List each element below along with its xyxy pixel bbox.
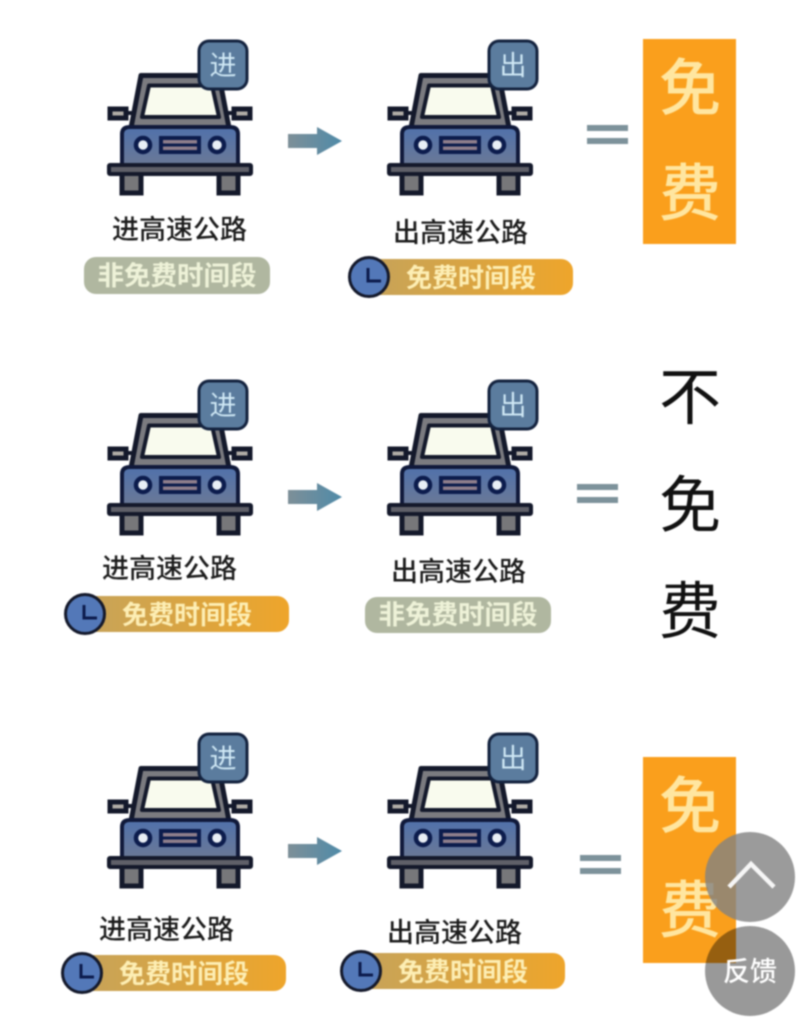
icon: exit car xyxy=(389,734,537,886)
button: scroll to top xyxy=(705,832,795,922)
text: entry label: 进高速公路 xyxy=(99,915,234,945)
icon: exit car: 出 xyxy=(500,391,526,421)
result: not free: 免 xyxy=(659,472,721,541)
icon: exit car: 出 xyxy=(500,744,526,774)
pill: non-free period: 非免费时间段 xyxy=(98,261,256,291)
result: free xyxy=(643,757,736,963)
icon: exit car xyxy=(389,41,537,193)
equals sign xyxy=(580,855,621,874)
text: entry label: 进高速公路 xyxy=(102,554,237,584)
equals sign xyxy=(577,484,618,503)
pill: free period with clock xyxy=(66,594,289,634)
icon: entry car: 进 xyxy=(210,391,236,421)
result: free: 免 xyxy=(659,773,721,842)
result: free: 费 xyxy=(659,160,721,229)
icon: exit car: 出 xyxy=(500,51,526,81)
result: free xyxy=(643,39,736,244)
result: not free: 费 xyxy=(659,578,721,647)
pill: free period with clock xyxy=(342,952,565,990)
pill: non-free period: 非免费时间段 xyxy=(378,600,538,630)
pill: free period with clock xyxy=(350,258,573,296)
result: not free: 不 xyxy=(659,364,721,433)
icon: entry car xyxy=(109,41,251,193)
panel: row 1 enter in paid period, exit in free period xyxy=(84,39,736,296)
text: exit label: 出高速公路 xyxy=(387,918,522,948)
icon: entry car xyxy=(109,381,251,533)
pill: free period with clock xyxy=(62,954,286,992)
button: feedback xyxy=(705,926,795,1016)
pill: free period with clock: 免费时间段 xyxy=(119,959,249,989)
icon: entry car xyxy=(109,734,251,886)
text: entry label: 进高速公路 xyxy=(112,215,247,245)
icon: exit car xyxy=(389,381,537,533)
icon: entry car: 进 xyxy=(210,744,236,774)
pill: free period with clock: 免费时间段 xyxy=(398,957,528,987)
icon: entry car: 进 xyxy=(210,51,236,81)
panel: row 2 enter in free period, exit in paid period xyxy=(66,364,721,647)
result: free: 免 xyxy=(659,55,721,124)
result: free: 费 xyxy=(659,877,721,946)
button: feedback: 反馈 xyxy=(723,957,777,987)
pill: free period with clock: 免费时间段 xyxy=(122,600,252,630)
arrow xyxy=(288,127,342,155)
pill: non-free period xyxy=(84,257,270,294)
pill: free period with clock: 免费时间段 xyxy=(406,263,536,293)
arrow xyxy=(288,483,342,511)
panel: row 3 enter and exit in free period xyxy=(62,734,736,992)
text: exit label: 出高速公路 xyxy=(391,557,526,587)
equals sign xyxy=(587,125,628,144)
arrow xyxy=(288,837,342,865)
text: exit label: 出高速公路 xyxy=(393,218,528,248)
result: not free xyxy=(659,364,721,647)
